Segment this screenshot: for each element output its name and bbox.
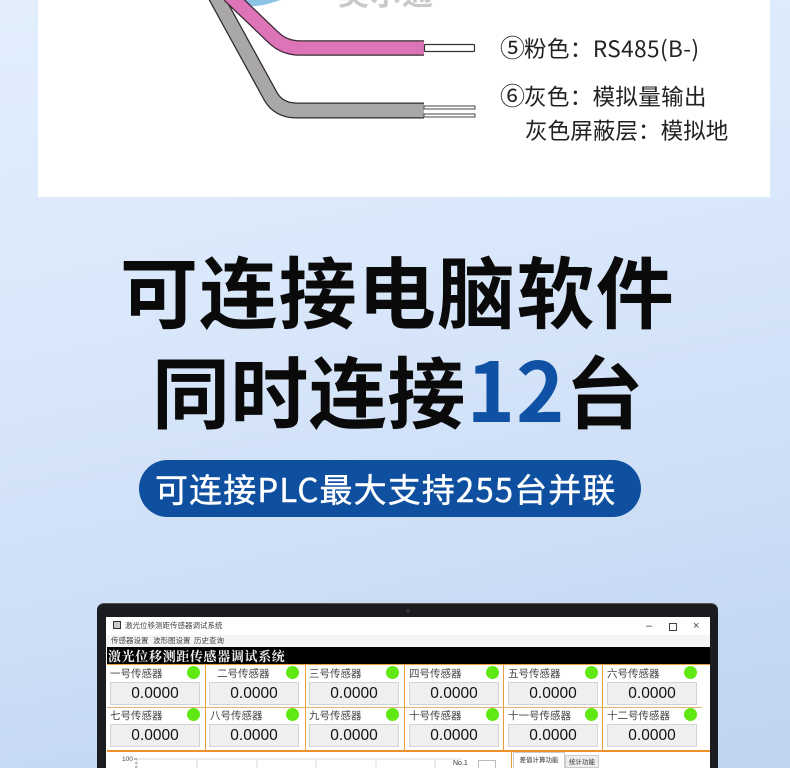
sensor 5: 五号传感器 [508,666,560,681]
window title: 激光位移测距传感器调试系统 [125,620,222,631]
sensor 6 [607,666,697,705]
sensor 8: 0.0000 [230,727,278,744]
wiring diagram: pink and gray cables [208,0,476,118]
sensor 12: 0.0000 [628,727,676,744]
menu bar [106,635,710,647]
gray cable [215,0,475,117]
tab: statistics: 统计功能 [569,756,595,766]
tabs [511,752,710,768]
legend: No.1 [453,760,468,767]
sensor 1: 一号传感器 [110,666,162,681]
heading line 1: 可连接电脑软件 [120,233,675,345]
sensor 4 [409,666,499,705]
sensor 9 [309,708,399,747]
panel: wiring diagram card [38,0,770,197]
label: gray wire: ⑥灰色：模拟量输出 [500,77,707,113]
sensor 11: 0.0000 [529,727,577,744]
webcam [406,609,410,613]
sensor 12 [607,708,697,747]
window controls: × [693,620,699,632]
legend plot button [478,760,496,768]
label: pink wire: ⑤粉色：RS485(B-) [500,29,700,65]
menu bar: 波形图设置 [153,635,190,646]
sensor 5 [508,666,598,705]
sensor 10: 十号传感器 [409,708,462,723]
sensor 2: 0.0000 [230,685,278,702]
sensor 12: 十二号传感器 [607,708,670,723]
sensor grid [107,664,710,752]
sensor 9: 九号传感器 [309,708,362,723]
menu bar: 传感器设置 [111,635,148,646]
sensor 3 [309,666,399,705]
system banner [107,647,710,664]
pill callout [139,460,641,517]
heading line 2: 同时连接12台 [152,327,644,446]
window controls: – [646,620,652,632]
software window [106,617,710,768]
sensor 11 [508,708,598,747]
sensor 1: 0.0000 [131,685,179,702]
tab: statistics [565,755,599,768]
tab: difference calculation: 差值计算功能 [520,754,558,764]
sensor 10: 0.0000 [430,727,478,744]
sensor 11: 十一号传感器 [508,708,571,723]
sensor 2: 二号传感器 [217,666,270,681]
pill text: 可连接PLC最大支持255台并联 [155,464,616,512]
sensor 10 [409,708,499,747]
tab: difference calculation [513,752,565,768]
sensor 8: 八号传感器 [210,708,262,723]
waveform chart [122,756,468,768]
window controls [646,620,699,632]
sensor 4: 0.0000 [430,685,478,702]
app icon [113,621,121,629]
title bar [106,617,710,635]
pink cable [229,0,474,52]
sensor 6: 0.0000 [628,685,676,702]
sensor 7: 七号传感器 [110,708,162,723]
sensor 9: 0.0000 [330,727,378,744]
sensor 8 [209,708,299,747]
sensor 1 [110,666,200,705]
sensor 3: 三号传感器 [309,666,362,681]
plot area [134,758,462,768]
sensor 6: 六号传感器 [607,666,660,681]
laptop frame [97,603,718,768]
axis label: 100 [122,756,133,763]
sensor 7 [110,708,200,747]
label: gray shield: 灰色屏蔽层：模拟地 [525,114,728,146]
sensor 4: 四号传感器 [409,666,462,681]
sensor 7: 0.0000 [131,727,179,744]
system banner: 激光位移测距传感器调试系统 [108,646,285,665]
menu bar: 历史查询 [194,635,224,646]
sensor 3: 0.0000 [330,685,378,702]
sensor 2 [209,666,299,705]
sensor 5: 0.0000 [529,685,577,702]
